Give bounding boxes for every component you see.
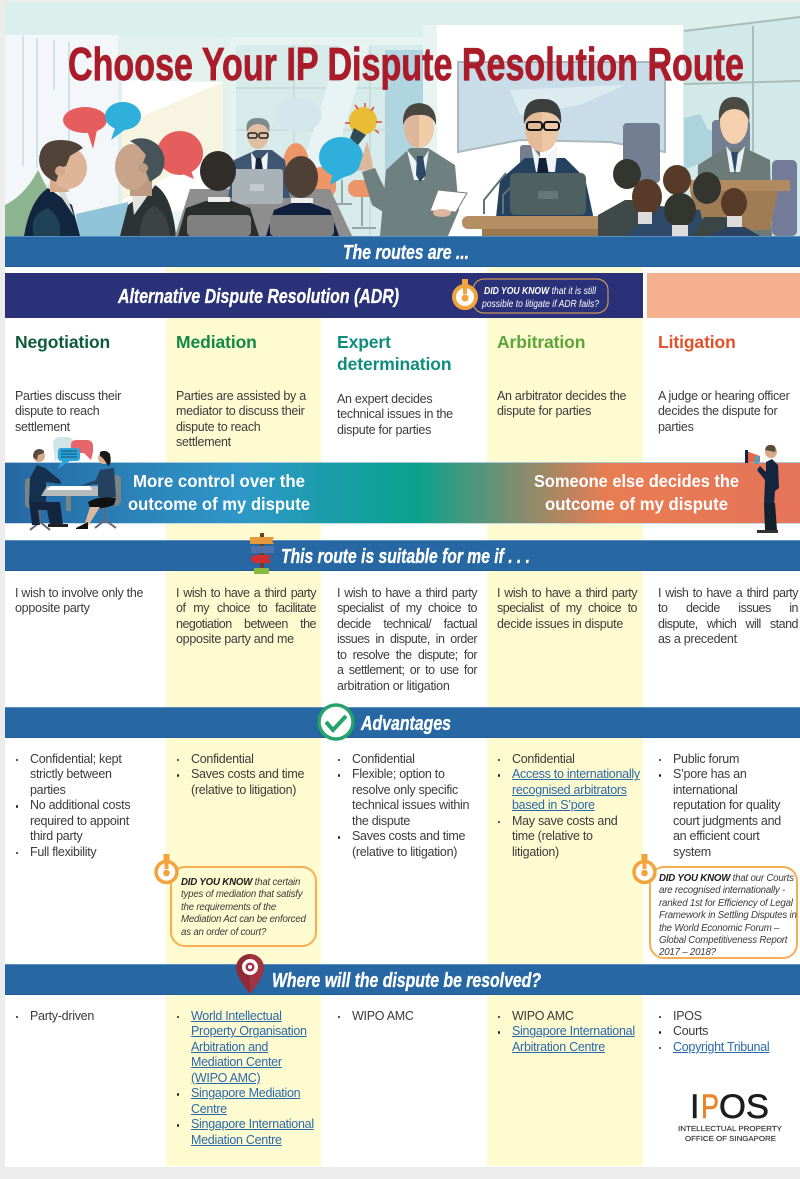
callout text: DID YOU KNOW that our Courts [659, 873, 794, 884]
speaker man left [24, 140, 87, 236]
callout box [649, 866, 798, 959]
suitability column: arbitration: I wish to have a third party [497, 586, 637, 600]
callout text: DID YOU KNOW that certain [181, 877, 300, 888]
gradient bar: control spectrum [5, 462, 800, 524]
suitability column: arbitration: specialist of my choice to [497, 601, 637, 615]
ADR header band [5, 273, 643, 318]
description: settlement [176, 435, 231, 449]
yellow column: mediation [166, 267, 321, 1166]
suitability column: arbitration [497, 586, 638, 631]
ADR heading: Alternative Dispute Resolution (ADR) [117, 286, 399, 308]
suitability column: expert determination [337, 586, 478, 693]
advantages: mediation: (relative to litigation) [191, 783, 296, 797]
where: mediation: Singapore Mediation [191, 1086, 300, 1100]
suitability column: negotiation: opposite party [15, 601, 90, 615]
callout text: are recognised internationally - [659, 885, 785, 896]
column: arbitration [497, 332, 626, 418]
gradient bar: control spectrum: outcome of my dispute [128, 494, 310, 514]
where: litigation: Copyright Tribunal [673, 1040, 769, 1054]
where: mediation: World Intellectual [191, 1009, 282, 1023]
description: Parties are assisted by a [176, 389, 306, 403]
where: expert determination: WIPO AMC [352, 1009, 414, 1023]
description: settlement [15, 420, 70, 434]
callout text: the requirements of the [181, 902, 276, 913]
callout text: the World Economic Forum – [659, 923, 779, 934]
where: negotiation: Party-driven [30, 1009, 94, 1023]
where: mediation: Singapore International [191, 1117, 314, 1131]
advantages: negotiation: parties [30, 783, 66, 797]
where: mediation: (WIPO AMC) [191, 1071, 260, 1085]
callout text [659, 873, 797, 958]
presenter [358, 103, 467, 236]
advantages: negotiation: strictly between [30, 767, 112, 781]
heading [337, 332, 451, 374]
advantages: negotiation: Confidential; kept [30, 752, 122, 766]
advantages: expert determination: (relative to litigation) [352, 845, 457, 859]
left speech bubbles [63, 102, 203, 179]
icon: green check [317, 703, 355, 741]
description: dispute for parties [337, 423, 431, 437]
litigation header band [647, 273, 800, 318]
did you know callout: ADR [452, 278, 609, 314]
suitability column: litigation: I wish to have a third party [658, 586, 798, 600]
blue office chairs [520, 120, 797, 236]
description: An arbitrator decides the [497, 389, 626, 403]
advantages: arbitration: time (relative to [512, 829, 593, 843]
bar: advantages heading [5, 707, 800, 738]
callout text: Framework in Settling Disputes in [659, 910, 797, 921]
description: dispute to reach [15, 404, 99, 418]
callout text [181, 877, 306, 938]
gradient bar: control spectrum: outcome of my dispute [545, 494, 728, 514]
where: mediation: Mediation Center [191, 1055, 282, 1069]
main speaker with laptop at podium [462, 99, 630, 236]
icon: exclamation [154, 854, 179, 884]
advantages: mediation: Confidential [191, 752, 254, 766]
advantages: expert determination: technical issues within [352, 798, 469, 812]
description: decides the dispute for [658, 404, 777, 418]
suitability column: negotiation [15, 586, 143, 615]
description [658, 389, 790, 434]
suitability column: expert determination: I wish to have a third party [337, 586, 477, 600]
callout text: 2017 – 2018? [659, 947, 716, 958]
speaker man right [115, 138, 176, 236]
heading: Expert [337, 332, 391, 352]
description: dispute for parties [497, 404, 591, 418]
advantages: expert determination: Flexible; option to [352, 767, 445, 781]
yellow column: arbitration [487, 267, 643, 1166]
advantages: arbitration: May save costs and [512, 814, 617, 828]
suitability column: litigation: to decide issues in [658, 601, 798, 615]
where: litigation: IPOS [673, 1009, 702, 1023]
gradient bar: control spectrum: More control over the [133, 471, 305, 491]
advantages: litigation: system [673, 845, 711, 859]
description [176, 389, 306, 449]
heading: Negotiation [15, 332, 110, 352]
suitability column: expert determination: specialist of my choice to [337, 601, 477, 615]
advantages: arbitration [498, 752, 640, 859]
suitability column: mediation: I wish to have a third party [176, 586, 316, 600]
description: parties [658, 420, 694, 434]
icon: map pin [236, 954, 264, 994]
IPOS logo: P [701, 1088, 719, 1126]
where: arbitration: Arbitration Centre [512, 1040, 605, 1054]
conference table [175, 189, 352, 236]
advantages: mediation [177, 752, 304, 797]
IPOS logo: INTELLECTUAL PROPERTY [678, 1124, 782, 1133]
advantages: negotiation: third party [30, 829, 82, 843]
icon: exclamation [632, 854, 657, 884]
hero banner with title and meeting illustration [5, 2, 800, 236]
advantages: expert determination [338, 752, 469, 859]
advantages: arbitration: litigation) [512, 845, 559, 859]
description: A judge or hearing officer [658, 389, 789, 403]
did you know callout: litigation [632, 854, 798, 959]
did you know callout: mediation [154, 854, 317, 947]
advantages: litigation: Public forum [673, 752, 739, 766]
heading: Litigation [658, 332, 736, 352]
suitability column: arbitration: decide issues in dispute [497, 617, 623, 631]
where: mediation: Arbitration and [191, 1040, 268, 1054]
seated attendees [178, 151, 339, 236]
suitability column: expert determination: arbitration or litigation [337, 679, 450, 693]
description: Parties discuss their [15, 389, 121, 403]
suitability column: litigation: dispute, which will stand [658, 617, 798, 631]
callout text: Global Competitiveness Report [659, 935, 787, 946]
suitability column: negotiation: I wish to involve only the [15, 586, 143, 600]
icon: signpost [250, 533, 274, 574]
IPOS logo: I [690, 1088, 699, 1126]
advantages: arbitration: based in S’pore [512, 798, 595, 812]
heading: Mediation [176, 332, 257, 352]
advantages: expert determination: Confidential [352, 752, 415, 766]
where: mediation [177, 1009, 314, 1147]
where: mediation: Centre [191, 1102, 227, 1116]
advantages: negotiation: Full flexibility [30, 845, 96, 859]
advantages: litigation: international [673, 783, 737, 797]
IPOS logo: OFFICE OF SINGAPORE [685, 1134, 776, 1143]
suitability column: mediation [176, 586, 316, 646]
right standing man [690, 97, 790, 236]
where: litigation [659, 1009, 770, 1054]
IPOS logo [672, 1090, 792, 1145]
heading: determination [337, 354, 451, 374]
description [337, 392, 453, 437]
IPOS logo: OS [719, 1088, 769, 1126]
where: arbitration [498, 1009, 635, 1054]
column: expert determination [337, 332, 453, 437]
suitability column: litigation: as a precedent [658, 632, 737, 646]
where: mediation: Property Organisation [191, 1024, 307, 1038]
where: litigation: Courts [673, 1024, 708, 1038]
advantages: expert determination: the dispute [352, 814, 410, 828]
where: arbitration: Singapore International [512, 1024, 635, 1038]
callout text: Mediation Act can be enforced [181, 914, 306, 925]
bar: the routes are [5, 236, 800, 267]
description: technical issues in the [337, 407, 453, 421]
did you know callout: ADR: possible to litigate if ADR fails? [481, 298, 599, 310]
callout text: types of mediation that satisfy [181, 889, 302, 900]
advantages: expert determination: Saves costs and time [352, 829, 465, 843]
suitability column: expert determination: decide technical/ factual [337, 617, 477, 631]
advantages: negotiation: No additional costs [30, 798, 130, 812]
column: litigation [658, 332, 790, 434]
description: An expert decides [337, 392, 432, 406]
suitability column: expert determination: issues in dispute, in order [337, 632, 477, 646]
bar: the routes are: The routes are ... [343, 242, 469, 264]
description [497, 389, 626, 418]
where: mediation: Mediation Centre [191, 1133, 282, 1147]
suitability column: expert determination: a settlement; or to use for [337, 663, 477, 677]
description: dispute to reach [176, 420, 260, 434]
advantages: mediation: Saves costs and time [191, 767, 304, 781]
advantages: litigation: S’pore has an [673, 767, 746, 781]
heading: Arbitration [497, 332, 585, 352]
bar: suitability heading: This route is suitable for me if . . . [281, 546, 530, 568]
suitability column: mediation: opposite party and me [176, 632, 294, 646]
audience [598, 159, 760, 236]
bar: advantages heading: Advantages [360, 713, 451, 735]
plant [5, 170, 48, 236]
advantages: negotiation [16, 752, 130, 859]
advantages: arbitration: recognised arbitrators [512, 783, 627, 797]
icon: man with megaphone [745, 444, 779, 533]
description: mediator to discuss their [176, 404, 304, 418]
advantages: negotiation: required to appoint [30, 814, 129, 828]
suitability column: litigation [658, 586, 798, 646]
advantages: expert determination: resolve only specific [352, 783, 458, 797]
advantages: litigation: court judgments and [673, 814, 781, 828]
where: arbitration: WIPO AMC [512, 1009, 574, 1023]
centre man with laptop [228, 118, 290, 204]
light bulb idea bubble [319, 103, 382, 185]
advantages: litigation: an efficient court [673, 829, 759, 843]
advantages: litigation [659, 752, 781, 859]
orange chairs [283, 143, 384, 197]
suitability column: expert determination: to resolve the dispute; for [337, 648, 477, 662]
column: mediation [176, 332, 306, 449]
advantages: arbitration: Confidential [512, 752, 575, 766]
bar: where heading [5, 964, 800, 995]
did you know callout: ADR: DID YOU KNOW that it is still [484, 285, 597, 297]
callout text: as an order of court? [181, 927, 266, 938]
bar: suitability heading [5, 540, 800, 571]
description [15, 389, 122, 434]
icon: two people at a table [25, 437, 121, 531]
suitability column: mediation: of my choice to facilitate [176, 601, 316, 615]
suitability column: mediation: negotiation between the [176, 617, 316, 631]
bar: where heading: Where will the dispute be resolved? [272, 970, 541, 992]
advantages: arbitration: Access to internationally [512, 767, 640, 781]
column: negotiation [15, 332, 122, 434]
gradient bar: control spectrum: Someone else decides the [534, 471, 739, 491]
callout text: ranked 1st for Efficiency of Legal [659, 898, 793, 909]
advantages: litigation: reputation for quality [673, 798, 780, 812]
callout box [170, 866, 317, 947]
